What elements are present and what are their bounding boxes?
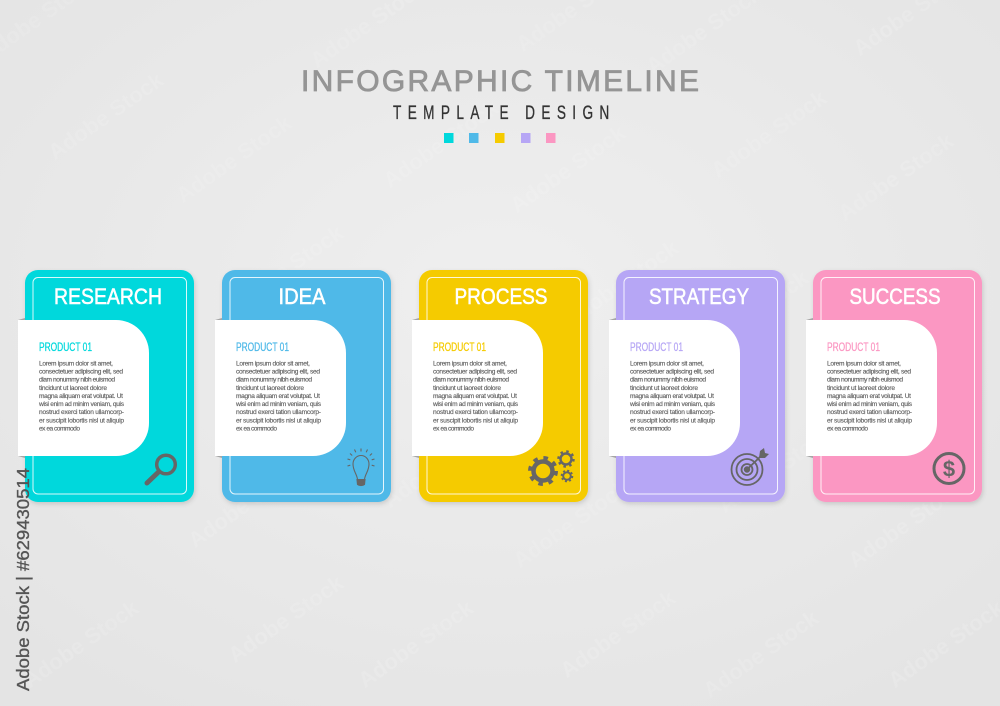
body text: er suscipit lobortis nisl ut aliquip — [39, 417, 124, 424]
body text: wisi enim ad minim veniam, quis — [235, 401, 322, 408]
body text: magna aliquam erat volutpat. Ut — [433, 393, 517, 400]
product label: PRODUCT 01 — [39, 342, 92, 354]
body text: nostrud exerci tation ullamcorp- — [39, 409, 124, 416]
body text: Lorem ipsum dolor sit amet, — [827, 360, 901, 368]
body text: tincidunt ut laoreet dolore — [39, 385, 107, 392]
watermarks: Adobe Stock — [706, 85, 832, 183]
body text: diam nonummy nibh euismod — [630, 377, 706, 384]
white content card — [806, 320, 937, 456]
body text: diam nonummy nibh euismod — [433, 377, 509, 384]
body text: tincidunt ut laoreet dolore — [236, 385, 304, 392]
body text: Lorem ipsum dolor sit amet, — [39, 360, 113, 368]
watermarks: Adobe Stock — [843, 475, 969, 573]
watermarks: Adobe Stock — [378, 415, 504, 513]
icon: gears — [530, 452, 574, 484]
watermarks: Adobe Stock — [223, 220, 349, 318]
title: INFOGRAPHIC TIMELINE — [301, 65, 699, 98]
body text: magna aliquam erat volutpat. Ut — [39, 393, 123, 400]
watermarks: Adobe Stock — [353, 595, 479, 693]
body text: consectetuer adipiscing elit, sed — [39, 368, 123, 376]
product label: PRODUCT 01 — [236, 342, 289, 354]
body text: nostrud exerci tation ullamcorp- — [433, 409, 518, 416]
body text — [235, 360, 322, 432]
watermarks: Adobe Stock — [53, 395, 179, 493]
white content card — [609, 320, 740, 456]
heading: success: SUCCESS — [850, 284, 940, 309]
body text — [629, 360, 716, 432]
body text: nostrud exerci tation ullamcorp- — [827, 409, 912, 416]
product label: PRODUCT 01 — [827, 342, 880, 354]
body text: tincidunt ut laoreet dolore — [827, 385, 895, 392]
watermarks: Adobe Stock — [183, 455, 309, 553]
body text: wisi enim ad minim veniam, quis — [38, 401, 125, 408]
body text: consectetuer adipiscing elit, sed — [827, 368, 911, 376]
body text: consectetuer adipiscing elit, sed — [433, 368, 517, 376]
body text: Lorem ipsum dolor sit amet, — [236, 360, 310, 368]
icon: magnifier — [147, 455, 175, 483]
watermarks: Adobe Stock — [505, 120, 631, 218]
panel: process — [412, 270, 588, 502]
icon: dollar coin: $ — [943, 456, 955, 482]
watermarks: Adobe Stock — [378, 95, 504, 193]
body text: consectetuer adipiscing elit, sed — [236, 368, 320, 376]
panel: strategy — [609, 270, 785, 502]
icon: light bulb — [348, 448, 374, 486]
watermarks: Adobe Stock — [171, 110, 297, 208]
product label: PRODUCT 01 — [630, 342, 683, 354]
panel: idea — [215, 270, 391, 502]
heading: process: PROCESS — [454, 284, 548, 309]
colour key squares — [444, 133, 556, 143]
icon: target with arrow — [732, 448, 769, 485]
body text: nostrud exerci tation ullamcorp- — [630, 409, 715, 416]
body text: ex ea commodo — [433, 426, 474, 432]
body text: wisi enim ad minim veniam, quis — [629, 401, 716, 408]
body text: magna aliquam erat volutpat. Ut — [827, 393, 911, 400]
body text: ex ea commodo — [630, 426, 671, 432]
body text — [38, 360, 125, 432]
body text: Lorem ipsum dolor sit amet, — [630, 360, 704, 368]
watermarks: Adobe Stock — [508, 475, 634, 573]
heading: strategy: STRATEGY — [649, 284, 749, 309]
body text: ex ea commodo — [827, 426, 868, 432]
body text: diam nonummy nibh euismod — [236, 377, 312, 384]
body text: Lorem ipsum dolor sit amet, — [433, 360, 507, 368]
subtitle: TEMPLATE DESIGN — [393, 102, 609, 124]
white content card — [412, 320, 543, 456]
watermarks: Adobe Stock — [558, 235, 684, 333]
body text: er suscipit lobortis nisl ut aliquip — [433, 417, 518, 424]
body text: diam nonummy nibh euismod — [39, 377, 115, 384]
watermarks: Adobe Stock — [833, 128, 959, 226]
panel: success — [806, 270, 982, 502]
body text: magna aliquam erat volutpat. Ut — [630, 393, 714, 400]
watermarks: Adobe Stock — [18, 595, 144, 693]
body text — [826, 360, 913, 432]
white content card — [18, 320, 149, 456]
body text: ex ea commodo — [39, 426, 80, 432]
watermarks: Adobe Stock — [43, 67, 169, 165]
body text: er suscipit lobortis nisl ut aliquip — [236, 417, 321, 424]
body text: wisi enim ad minim veniam, quis — [826, 401, 913, 408]
watermarks: Adobe Stock — [223, 570, 349, 668]
watermarks: Adobe Stock — [698, 605, 824, 703]
body text: magna aliquam erat volutpat. Ut — [236, 393, 320, 400]
white content card — [215, 320, 346, 456]
body text: er suscipit lobortis nisl ut aliquip — [630, 417, 715, 424]
panel: research — [18, 270, 194, 502]
icon: dollar coin — [934, 454, 964, 484]
body text: tincidunt ut laoreet dolore — [433, 385, 501, 392]
body text: diam nonummy nibh euismod — [827, 377, 903, 384]
body text: wisi enim ad minim veniam, quis — [432, 401, 519, 408]
heading: idea: IDEA — [278, 284, 326, 309]
body text: ex ea commodo — [236, 426, 277, 432]
body text: consectetuer adipiscing elit, sed — [630, 368, 714, 376]
watermarks: Adobe Stock — [713, 420, 839, 518]
stock id label: Adobe Stock | #629430514 — [13, 468, 33, 691]
body text: nostrud exerci tation ullamcorp- — [236, 409, 321, 416]
product label: PRODUCT 01 — [433, 342, 486, 354]
body text: er suscipit lobortis nisl ut aliquip — [827, 417, 912, 424]
heading: research: RESEARCH — [54, 284, 162, 309]
body text: tincidunt ut laoreet dolore — [630, 385, 698, 392]
body text — [432, 360, 519, 432]
watermarks: Adobe Stock — [555, 585, 681, 683]
watermarks: Adobe Stock — [688, 265, 814, 363]
